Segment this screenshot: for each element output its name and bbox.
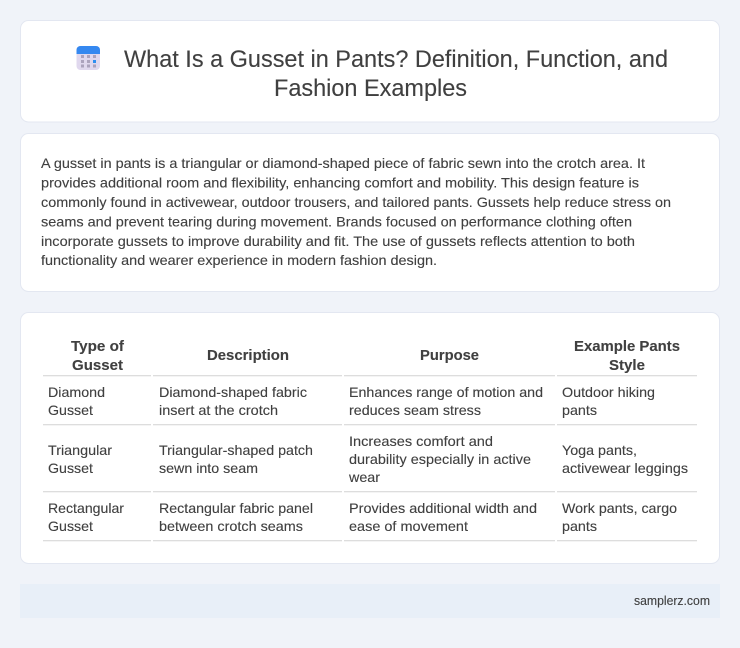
- footer bar: [20, 584, 720, 618]
- table row: triangular gusset: Gusset: [48, 460, 93, 476]
- panel: gusset table: [20, 312, 720, 564]
- text block: definition: [41, 155, 671, 268]
- table row: rectangular gusset: Gusset: [48, 518, 93, 534]
- table row: diamond gusset: Diamond-shaped fabric: [159, 384, 307, 400]
- table header row: Style: [609, 357, 645, 374]
- table row: triangular gusset: [48, 433, 688, 485]
- table row: triangular gusset: Increases comfort and: [349, 433, 493, 449]
- table row: diamond gusset: reduces seam stress: [349, 402, 481, 418]
- table row: diamond gusset: Outdoor hiking: [562, 384, 655, 400]
- title: What Is a Gusset in Pants? Definition, Function, and: [124, 46, 668, 73]
- table row: rectangular gusset: Rectangular fabric panel: [159, 500, 313, 516]
- table header row: Example Pants: [574, 338, 680, 355]
- text block: definition: commonly found in activewear, outdoor trousers, and tailored pants. Gussets help reduce stress on: [41, 194, 671, 210]
- table header row: Gusset: [72, 357, 123, 374]
- table header row: Description: [207, 347, 289, 364]
- footer source text: samplerz.com: [634, 594, 710, 608]
- text block: definition: incorporate gussets to improve durability and fit. The use of gussets reflects attention to both: [41, 233, 635, 249]
- table header row: Type of: [71, 338, 125, 355]
- table row: rectangular gusset: Work pants, cargo: [562, 500, 677, 516]
- text block: definition: functionality and wearer experience in modern fashion design.: [41, 252, 437, 268]
- icon: calendar: [76, 46, 100, 70]
- text block: definition: seams and prevent tearing during movement. Brands focused on performance clothing often: [41, 214, 632, 230]
- table row: rectangular gusset: [48, 500, 677, 534]
- table header row: Purpose: [420, 347, 479, 364]
- table row: diamond gusset: Diamond: [48, 384, 105, 400]
- table row: rectangular gusset: ease of movement: [349, 518, 468, 534]
- table row: diamond gusset: insert at the crotch: [159, 402, 278, 418]
- table row: triangular gusset: wear: [348, 469, 380, 485]
- table row: diamond gusset: Enhances range of motion and: [349, 384, 543, 400]
- table header row: [71, 338, 680, 374]
- table row: triangular gusset: Yoga pants,: [562, 442, 637, 458]
- table row: diamond gusset: pants: [562, 402, 597, 418]
- text block: definition: provides additional room and flexibility, enhancing comfort and mobility. This design feature is: [41, 174, 639, 190]
- table row: rectangular gusset: pants: [562, 518, 597, 534]
- panel: title card: [20, 20, 720, 122]
- table row: triangular gusset: sewn into seam: [159, 460, 258, 476]
- table row: triangular gusset: Triangular-shaped patch: [159, 442, 313, 458]
- table row: diamond gusset: [48, 384, 655, 418]
- table row: rectangular gusset: between crotch seams: [159, 518, 303, 534]
- title: Fashion Examples: [274, 75, 467, 102]
- table row: triangular gusset: Triangular: [48, 442, 112, 458]
- table row: rectangular gusset: Provides additional width and: [349, 500, 537, 516]
- title: [124, 46, 668, 102]
- text block: definition: A gusset in pants is a triangular or diamond-shaped piece of fabric sewn into the crotch area. It: [41, 155, 645, 171]
- panel: definition paragraph: [20, 134, 720, 292]
- table row: diamond gusset: Gusset: [48, 402, 93, 418]
- table row: triangular gusset: durability especially in active: [349, 451, 531, 467]
- table row: triangular gusset: activewear leggings: [562, 460, 688, 476]
- table row: rectangular gusset: Rectangular: [48, 500, 124, 516]
